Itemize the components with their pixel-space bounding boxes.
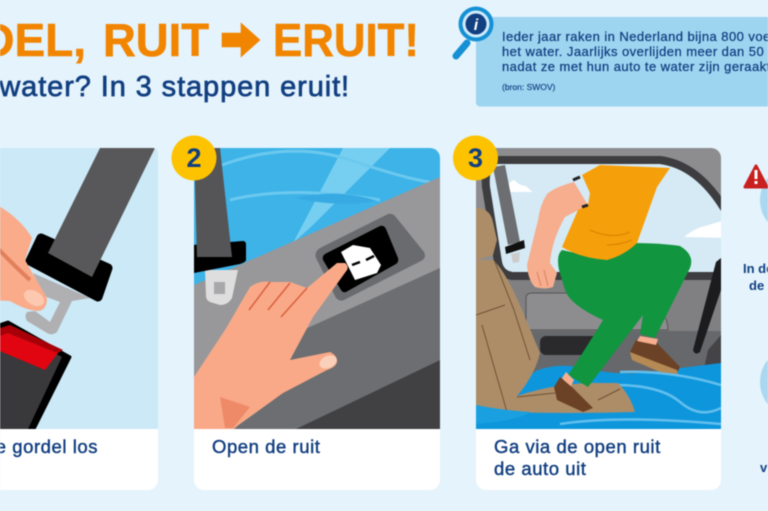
caption: Ga via de open ruit (494, 436, 661, 457)
shirt (562, 165, 670, 260)
panel: step 2 (190, 148, 440, 490)
skin at rear ankle (637, 336, 658, 345)
icon: magnifier (456, 6, 494, 56)
badge: step 3: 3 (468, 143, 483, 173)
title: ERUIT! (273, 14, 419, 66)
sleeve edges (573, 177, 588, 207)
circle 1 (760, 165, 768, 235)
caption: de auto uit (494, 458, 586, 479)
strap (48, 148, 155, 277)
icon: warning triangle (745, 166, 767, 187)
metal tongue (26, 273, 90, 334)
hand (194, 263, 348, 429)
title: RUIT (103, 14, 209, 66)
panel: step 1 (0, 148, 160, 490)
panel: info box (476, 17, 768, 106)
seat belt (493, 165, 520, 245)
badge: step 2 (172, 136, 216, 180)
front foot (562, 372, 574, 388)
seat belt (205, 270, 238, 305)
illustration: window switch (190, 148, 440, 429)
icon: magnifier: i (474, 17, 479, 34)
rear shoe (630, 340, 680, 373)
title (0, 14, 419, 66)
illustration: leaving the car (476, 148, 728, 429)
badge: step 2: 2 (186, 143, 202, 173)
caption: Open de ruit (212, 436, 320, 457)
trousers (558, 243, 691, 387)
source: (bron: SWOV) (502, 82, 556, 92)
hand (0, 200, 47, 311)
badge: step 3 (453, 136, 498, 180)
panel: step 3 (476, 148, 728, 490)
panel: warnings (743, 165, 768, 475)
info text: nadat ze met hun auto te water zijn geraakt. (502, 59, 768, 74)
latch (30, 238, 108, 297)
water (476, 363, 721, 429)
circle 2 (760, 347, 768, 417)
seat (476, 208, 497, 260)
arm (527, 182, 588, 288)
subtitle: water? In 3 stappen eruit! (0, 71, 350, 103)
illustration: seat belt release (0, 148, 160, 429)
buckle (0, 322, 70, 429)
